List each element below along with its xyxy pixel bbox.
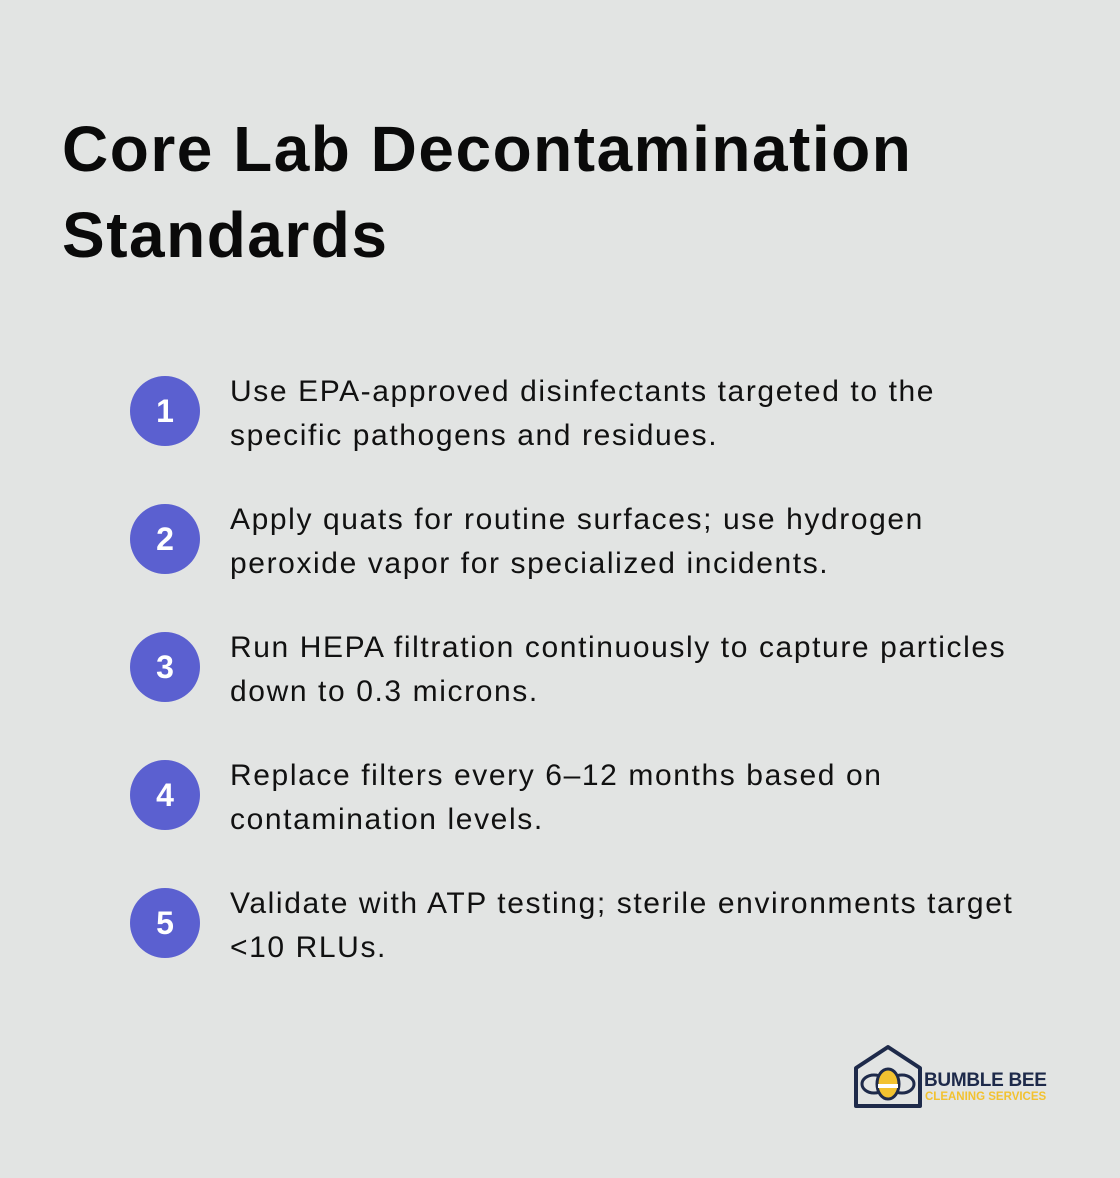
item 2: 2 bbox=[156, 521, 174, 557]
item 4: 4 bbox=[156, 777, 174, 813]
item 5: Validate with ATP testing; sterile environments target bbox=[230, 887, 1013, 920]
logo bbox=[854, 1045, 1047, 1108]
icon: bee house bbox=[854, 1045, 922, 1108]
item 5: <10 RLUs. bbox=[230, 931, 387, 964]
logo: BUMBLE BEE bbox=[924, 1070, 1047, 1091]
item 2: peroxide vapor for specialized incidents. bbox=[230, 547, 829, 580]
title bbox=[62, 113, 912, 271]
item 4 bbox=[130, 759, 883, 836]
item 1: specific pathogens and residues. bbox=[230, 419, 718, 452]
item 2 bbox=[130, 503, 924, 580]
item 5 bbox=[130, 887, 1013, 964]
item 5: 5 bbox=[156, 905, 174, 941]
item 2: Apply quats for routine surfaces; use hydrogen bbox=[230, 503, 924, 536]
title: Core Lab Decontamination bbox=[62, 113, 912, 185]
title: Standards bbox=[62, 199, 388, 271]
item 3: 3 bbox=[156, 649, 174, 685]
item 3 bbox=[130, 631, 1006, 708]
item 1: Use EPA-approved disinfectants targeted to the bbox=[230, 375, 935, 408]
item 4: contamination levels. bbox=[230, 803, 544, 836]
logo: CLEANING SERVICES bbox=[925, 1091, 1046, 1103]
item 1 bbox=[130, 375, 935, 452]
item 3: Run HEPA filtration continuously to capture particles bbox=[230, 631, 1006, 664]
item 4: Replace filters every 6–12 months based on bbox=[230, 759, 883, 792]
item 1: 1 bbox=[156, 393, 174, 429]
item 3: down to 0.3 microns. bbox=[230, 675, 539, 708]
